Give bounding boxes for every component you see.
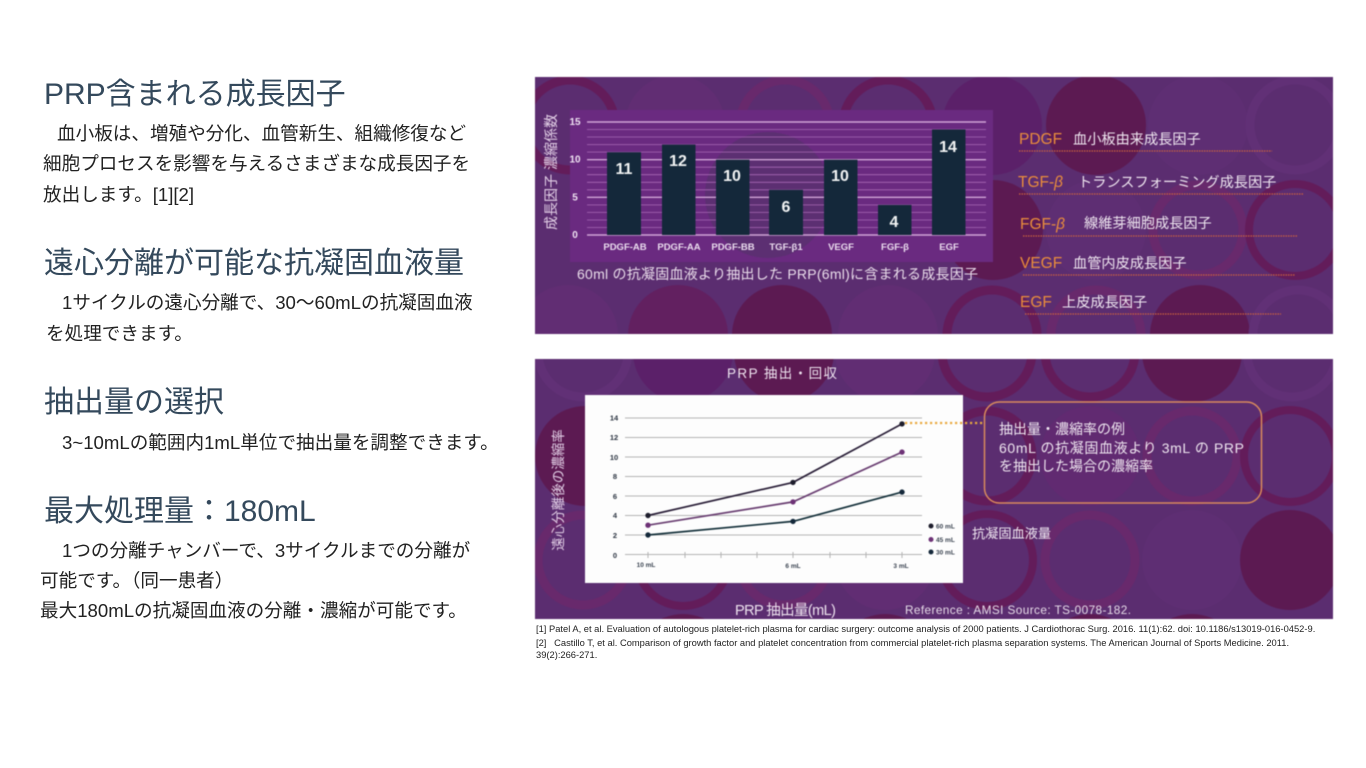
heading: blood volume: 遠心分離が可能な抗凝固血液量 (44, 247, 464, 280)
bar category labels: PDGF-AB (603, 242, 647, 253)
y tick labels: 8 (613, 472, 617, 481)
bar category labels (603, 242, 959, 253)
bar category labels: PDGF-BB (711, 242, 755, 253)
references: [1] Patel A, et al. Evaluation of autologous platelet-rich plasma for cardiac surgery: outcome analysis of 2000 patients. J Cardiothorac Surg. 2016. 11(1):62. doi: 10.1186/s13019-016-0452-9. (536, 624, 1315, 634)
text: blood volume body: を処理できます。 (46, 323, 193, 344)
x tick labels (637, 562, 909, 570)
chart: growth factor concentration (543, 110, 993, 262)
chart legend: 45 mL (936, 537, 955, 544)
y tick labels: 4 (613, 511, 618, 520)
callout: extraction example: 抽出量・濃縮率の例 (999, 421, 1125, 437)
text: extraction volume body: 3~10mLの範囲内1mL単位で抽出量を調整できます。 (62, 432, 499, 453)
reference source: Reference : AMSI Source: TS-0078-182. (905, 603, 1131, 617)
series: 60 mL (645, 421, 905, 518)
y tick labels: 10 (610, 453, 618, 462)
bar category labels: TGF-β1 (769, 242, 803, 253)
series: 30 mL (645, 489, 905, 538)
legend: growth factor abbreviations: FGF-β (1020, 216, 1065, 233)
y axis tick labels: 15 (569, 117, 581, 128)
text: maximum processing body (40, 540, 470, 621)
x tick labels: 10 mL (637, 562, 655, 569)
legend: growth factor abbreviations: 上皮成長因子 (1062, 295, 1147, 311)
bar category labels: FGF-β (881, 242, 909, 253)
heading: growth factors: PRP含まれる成長因子 (44, 78, 346, 111)
text: blood volume body (46, 292, 473, 344)
chart caption: 60ml の抗凝固血液より抽出した PRP(6ml)に含まれる成長因子 (577, 266, 978, 282)
y tick labels: 14 (610, 414, 619, 422)
x tick labels: 6 mL (785, 563, 801, 570)
panel: growth factor bar chart (534, 76, 1334, 335)
references (536, 624, 1315, 660)
heading: maximum processing: 最大処理量：180mL (44, 495, 316, 528)
section: anticoagulated blood volume text (44, 247, 473, 344)
text: blood volume body: 1サイクルの遠心分離で、30〜60mLの抗凝固血液 (62, 292, 473, 313)
y tick labels: 12 (610, 433, 618, 442)
x axis title: PRP 抽出量(mL) (735, 602, 836, 619)
x tick labels: 3 mL (893, 563, 909, 570)
legend: growth factor abbreviations: 血管内皮成長因子 (1073, 256, 1187, 272)
legend: growth factor abbreviations: TGF-β (1018, 174, 1063, 191)
y axis tick labels (569, 117, 581, 241)
y axis tick labels: 5 (572, 192, 578, 204)
panel: PRP extraction line chart (534, 358, 1334, 620)
legend: growth factor abbreviations: PDGF (1019, 131, 1062, 148)
chart legend: 60 mL (936, 524, 955, 530)
bars (607, 130, 966, 235)
bar values: 11 (616, 161, 633, 178)
legend: growth factor abbreviations: VEGF (1020, 255, 1062, 272)
text: maximum processing body: 1つの分離チャンバーで、3サイクルまでの分離が (62, 540, 470, 561)
text: growth factors body: 放出します。[1][2] (43, 184, 194, 205)
series: 45 mL (645, 449, 905, 528)
section: maximum processing text (40, 495, 470, 621)
bar values: 14 (939, 139, 957, 156)
text: maximum processing body: 最大180mLの抗凝固血液の分離・濃縮が可能です。 (40, 600, 467, 621)
text: growth factors body (43, 123, 470, 205)
legend: growth factor abbreviations: EGF (1020, 294, 1052, 311)
y tick labels: 6 (613, 492, 617, 501)
y tick labels: 2 (613, 531, 617, 540)
bar category labels: PDGF-AA (657, 242, 701, 253)
chart legend: 30 mL (936, 550, 955, 556)
bar values: 6 (782, 199, 791, 216)
bar values: 10 (831, 168, 849, 185)
section: extraction volume text (44, 386, 499, 453)
text: growth factors body: 血小板は、増殖や分化、血管新生、組織修復など (57, 123, 466, 144)
callout: extraction example: 60mL の抗凝固血液より 3mL の PRP (999, 440, 1244, 456)
bar values: 4 (890, 214, 899, 231)
legend: growth factor abbreviations: 線維芽細胞成長因子 (1084, 216, 1212, 232)
legend: growth factor abbreviations: トランスフォーミング成長因子 (1078, 175, 1276, 191)
y tick labels: 0 (613, 551, 617, 560)
bar values: 12 (669, 153, 687, 170)
y axis tick labels: 0 (572, 230, 578, 241)
legend: growth factor abbreviations: 血小板由来成長因子 (1073, 132, 1201, 148)
chart: concentration vs extraction volume (585, 395, 963, 583)
y axis tick labels: 10 (569, 154, 581, 166)
section: growth factors text (43, 78, 470, 205)
bar values (616, 139, 957, 231)
text: growth factors body: 細胞プロセスを影響を与えるさまざまな成長因子を (43, 153, 470, 174)
references: 39(2):266-271. (536, 650, 597, 660)
text: maximum processing body: 可能です。（同一患者） (40, 570, 233, 591)
heading: extraction volume: 抽出量の選択 (44, 386, 224, 419)
chart legend (928, 524, 955, 556)
y tick labels (610, 414, 619, 560)
dotted leader line (905, 422, 983, 424)
legend: growth factor abbreviations (1018, 131, 1304, 314)
label: anticoagulated blood volume: 抗凝固血液量 (972, 526, 1051, 541)
y axis title: 遠心分離後の濃縮率 (551, 429, 566, 551)
callout: extraction example: を抽出した場合の濃縮率 (999, 458, 1153, 474)
chart title: PRP 抽出・回収 (727, 366, 838, 381)
bar category labels: VEGF (828, 242, 854, 253)
references: [2] Castillo T, et al. Comparison of growth factor and platelet concentration from commercial platelet-rich plasma separation systems. The American Journal of Sports Medicine. 2011. (536, 638, 1289, 648)
y axis title: 成長因子 濃縮係数 (543, 114, 559, 230)
callout: extraction example (984, 402, 1262, 503)
bar category labels: EGF (939, 242, 959, 253)
bar values: 10 (723, 168, 741, 185)
